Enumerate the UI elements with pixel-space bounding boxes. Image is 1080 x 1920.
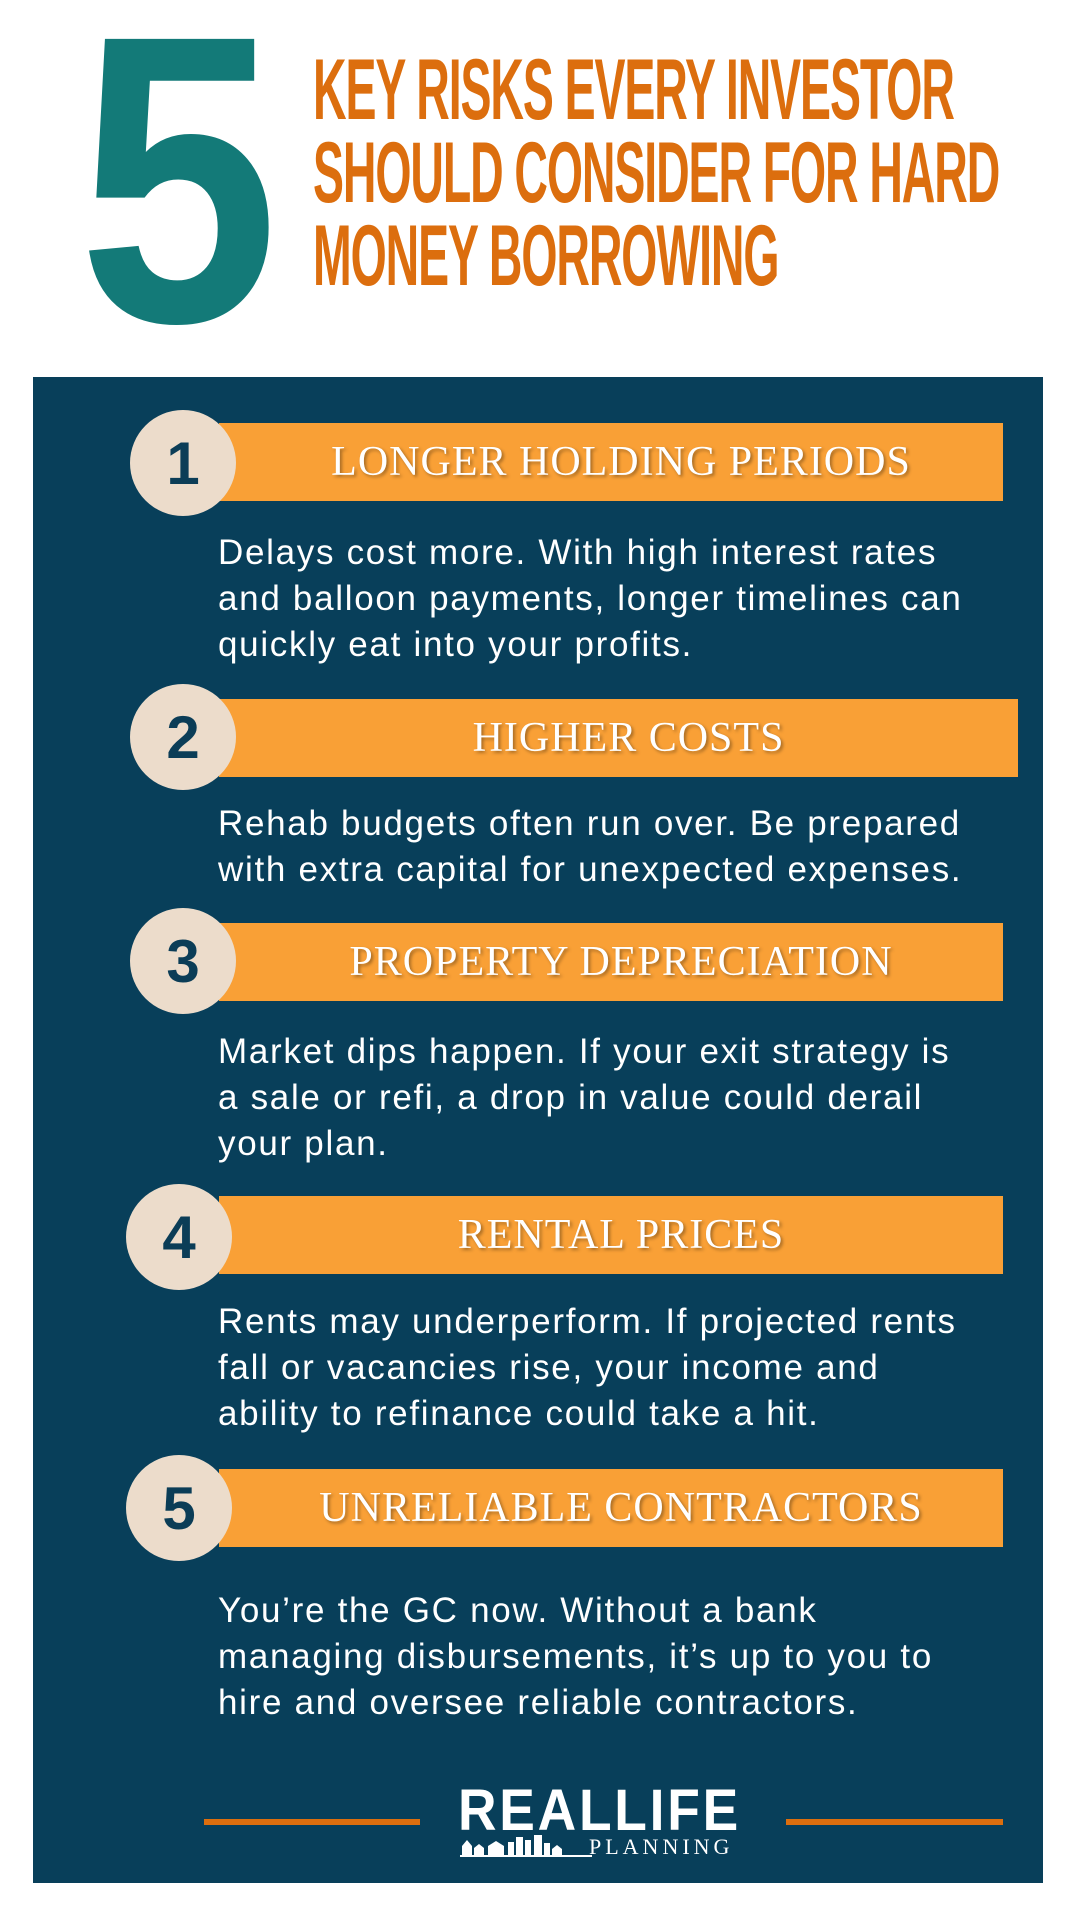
- text: risk 1: Delays cost more. With high interest rates: [218, 533, 937, 572]
- bar: risk 3 heading: [219, 923, 1003, 1001]
- bar: risk 4 heading: RENTAL PRICES: [458, 1212, 784, 1258]
- icon: skyline: [460, 1835, 592, 1857]
- icon: number 4: 4: [162, 1204, 196, 1270]
- bar: risk 5 heading: [219, 1469, 1003, 1547]
- text: risk 3: Market dips happen. If your exit strategy is: [218, 1032, 950, 1071]
- text: risk 3: your plan.: [218, 1124, 389, 1163]
- text: risk 3: a sale or refi, a drop in value could derail: [218, 1078, 923, 1117]
- icon: number 2: [130, 684, 236, 790]
- bar: risk 3 heading: PROPERTY DEPRECIATION: [349, 939, 893, 985]
- text: risk 4: [218, 1302, 957, 1433]
- icon: number 1: 1: [166, 430, 200, 496]
- icon: number 1: [130, 410, 236, 516]
- text: risk 5: [218, 1591, 933, 1722]
- text: risk 1: and balloon payments, longer timelines can: [218, 579, 963, 618]
- bar: risk 1 heading: LONGER HOLDING PERIODS: [331, 439, 911, 485]
- text: risk 4: Rents may underperform. If projected rents: [218, 1302, 957, 1341]
- text: risk 1: [218, 533, 963, 664]
- icon: number 5: [126, 1455, 232, 1561]
- logo subtext: PLANNING: [589, 1834, 733, 1859]
- icon: number 3: 3: [166, 928, 200, 994]
- text: risk 4: ability to refinance could take a hit.: [218, 1394, 820, 1433]
- text: risk 1: quickly eat into your profits.: [218, 625, 693, 664]
- panel: risks: [33, 377, 1043, 1883]
- bar: risk 2 heading: HIGHER COSTS: [473, 715, 784, 761]
- text: risk 2: Rehab budgets often run over. Be prepared: [218, 804, 961, 843]
- title: MONEY BORROWING: [313, 208, 778, 304]
- text: risk 4: fall or vacancies rise, your income and: [218, 1348, 880, 1387]
- bar: risk 5 heading: UNRELIABLE CONTRACTORS: [319, 1485, 923, 1531]
- footer line left: [204, 1819, 420, 1825]
- logo wordmark: REALLIFE: [458, 1778, 741, 1843]
- icon: number 4: [126, 1184, 232, 1290]
- icon: number 3: [130, 908, 236, 1014]
- text: risk 5: managing disbursements, it’s up to you to: [218, 1637, 933, 1676]
- text: risk 5: You’re the GC now. Without a bank: [218, 1591, 818, 1630]
- title: SHOULD CONSIDER FOR HARD: [313, 125, 999, 221]
- footer line right: [786, 1819, 1003, 1825]
- text: risk 5: hire and oversee reliable contractors.: [218, 1683, 858, 1722]
- bar: risk 4 heading: [219, 1196, 1003, 1274]
- icon: number 2: 2: [166, 704, 200, 770]
- bar: risk 2 heading: [219, 699, 1018, 777]
- logo: [458, 1778, 741, 1859]
- title: [313, 42, 999, 304]
- text: risk 3: [218, 1032, 950, 1163]
- text: risk 2: with extra capital for unexpected expenses.: [218, 850, 962, 889]
- text: risk 2: [218, 804, 962, 889]
- title: KEY RISKS EVERY INVESTOR: [313, 42, 954, 138]
- icon: number 5: 5: [162, 1474, 196, 1542]
- bar: risk 1 heading: [219, 423, 1003, 501]
